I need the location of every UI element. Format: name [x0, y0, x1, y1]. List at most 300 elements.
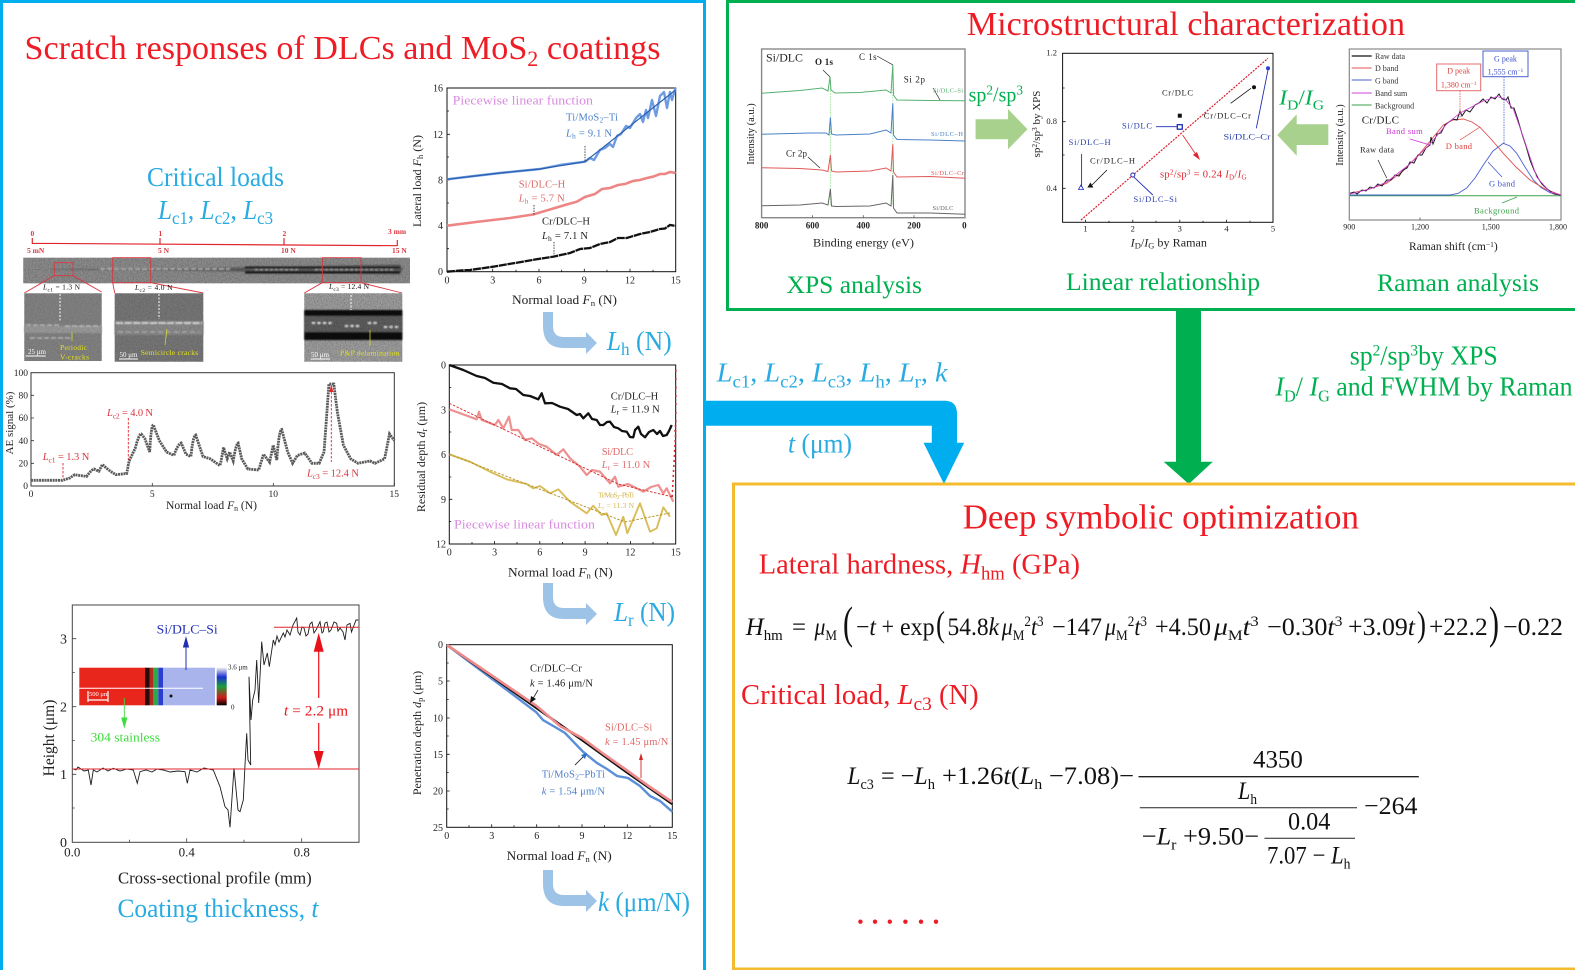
scale: scratch distance and load: 0 [30, 229, 34, 238]
formula: lateral hardness: 3 [1140, 614, 1147, 630]
chart: linear relationship: Cr/DLC–Cr [1204, 110, 1251, 120]
chart: penetration depth: 2 [575, 772, 579, 781]
heading: scratch responses: 2 [527, 46, 538, 71]
chart: residual depth: Residual depth d [414, 431, 428, 512]
chart: lateral load: L [541, 231, 548, 242]
heading: critical loads: c2 [215, 208, 230, 228]
chart: Raman spectrum: −1 [1517, 68, 1524, 74]
inset labels: critical loads on micrographs: L [134, 283, 139, 292]
chart: AE signal: n [234, 504, 238, 513]
inputs: microstructure parameters: /sp [1380, 340, 1410, 370]
chart: AE signal: 20 [18, 460, 28, 470]
chart: AE signal: (N) [238, 498, 257, 512]
label: ID/IG: D [1287, 98, 1298, 113]
arrow: microstructure data to optimization [1164, 310, 1213, 484]
formula: lateral hardness: μ [814, 614, 825, 641]
chart: penetration depth: Penetration depth d [410, 702, 424, 795]
formula: lateral hardness: μ [1213, 614, 1228, 641]
chart: residual depth: 3 [441, 406, 446, 416]
chart: height profile [41, 605, 359, 887]
chart: XPS spectra: Binding energy (eV) [813, 238, 914, 250]
chart: lateral load: 2 [599, 116, 603, 125]
formula: lateral hardness: 3 [1335, 614, 1342, 630]
chart: penetration depth: 6 [534, 831, 539, 842]
formula: lateral hardness: M [1013, 628, 1024, 644]
heading: critical loads: L [200, 195, 215, 225]
chart: linear relationship: 2 [1131, 224, 1135, 234]
chart: penetration depth: 0 [444, 831, 449, 842]
inputs: microstructure parameters [1274, 340, 1573, 406]
arrow: to k [543, 870, 597, 912]
chart: linear relationship: 2 [1030, 144, 1039, 148]
chart: residual depth: n [587, 571, 592, 581]
inputs: scratch parameters: k [935, 358, 949, 388]
chart: penetration depth: Si/DLC–Si [605, 723, 652, 734]
chart: lateral load: h [572, 132, 576, 141]
heading: critical load: Critical load, L [741, 680, 913, 711]
label: Lh: L [606, 326, 621, 356]
chart: Raman spectrum: 1,500 [1482, 222, 1500, 231]
chart: penetration depth: 20 [433, 786, 443, 798]
chart: penetration depth: 0 [438, 640, 443, 651]
chart: Raman spectrum: G band [1375, 76, 1398, 85]
chart: residual depth: 15 [671, 548, 681, 558]
chart: AE signal: 60 [18, 414, 28, 424]
chart: linear relationship: sp [1031, 147, 1043, 157]
inputs: scratch parameters: L [859, 358, 875, 388]
chart: lateral load [410, 84, 681, 308]
chart: Raman spectrum: 1,555 cm [1488, 67, 1517, 76]
chart: penetration depth: p [415, 698, 425, 702]
chart: AE signal: 40 [18, 437, 28, 447]
formula: critical load: c3 [860, 777, 874, 793]
chart: lateral load: Cr/DLC–H [542, 216, 590, 227]
chart: height profile: 2 [60, 700, 67, 716]
formula: lateral hardness: 2 [1024, 614, 1031, 630]
inset: semicircle cracks: 50 μm [120, 351, 138, 359]
chart: linear relationship: sp [1160, 169, 1170, 180]
inputs: scratch parameters: L [763, 358, 780, 388]
chart: residual depth: 9 [441, 495, 446, 506]
label: Lr: r [628, 610, 634, 630]
chart: XPS spectra: 200 [907, 220, 921, 230]
chart: Raman spectrum: 900 [1343, 222, 1355, 231]
chart: lateral load: 9 [582, 276, 587, 286]
chart: linear relationship: D [1135, 242, 1141, 251]
chart: XPS spectra: Si/DLC [766, 53, 803, 65]
chart: lateral load: Lateral load F [410, 159, 424, 227]
formula: critical load: −264 [1364, 793, 1418, 820]
inset: periodic V-cracks [24, 293, 102, 361]
label: sp2/sp3: sp [969, 83, 986, 107]
inputs: microstructure parameters: D [1284, 387, 1296, 406]
chart: residual depth: 12 [436, 540, 446, 550]
formula: critical load: 4350 [1253, 746, 1303, 773]
scale: scratch distance and load: 10 N [281, 246, 296, 255]
chart: AE signal [4, 369, 399, 513]
chart: residual depth: 0 [441, 360, 446, 372]
chart: Raman spectrum: D band [1446, 141, 1473, 151]
chart: residual depth: = 11.3 N [604, 501, 635, 510]
chart: lateral load: (N) [595, 292, 617, 307]
label: sp2/sp3: 3 [1016, 84, 1023, 99]
formula: lateral hardness: t [1243, 614, 1252, 641]
chart: residual depth: 0 [447, 548, 452, 558]
chart: linear relationship: 2 [1170, 168, 1174, 176]
formula: critical load: L [846, 763, 860, 790]
formula: lateral hardness: ) [1417, 603, 1426, 644]
formula: lateral hardness: + [882, 614, 894, 641]
chart: lateral load: Piecewise linear function [453, 92, 594, 107]
chart: lateral load: Normal load F [512, 292, 590, 307]
inputs: microstructure parameters: I [1274, 372, 1286, 402]
chart: penetration depth: 10 [433, 714, 443, 724]
inset labels: critical loads on micrographs: = 1.3 N [53, 282, 81, 291]
chart: AE signal: 10 [269, 490, 278, 500]
chart: residual depth: (μm) [414, 402, 428, 429]
formula: critical load: h [928, 777, 935, 793]
chart: linear relationship: by Raman [1154, 238, 1207, 250]
chart: AE signal: L [42, 452, 49, 463]
inputs: scratch parameters: c1 [733, 372, 750, 392]
chart: linear relationship: / [1141, 238, 1145, 250]
chart: linear relationship: Si/DLC–Si [1134, 194, 1178, 204]
scratch track micrograph [23, 258, 410, 293]
captions: analysis methods: Linear relationship [1066, 269, 1260, 296]
chart: linear relationship: by XPS [1031, 91, 1043, 127]
formula: critical load: +1.26t(L [942, 763, 1033, 790]
chart: lateral load: Ti/MoS [566, 113, 599, 124]
chart: residual depth: Cr/DLC–H [611, 391, 659, 402]
chart: Raman spectrum: 1,800 [1549, 222, 1567, 231]
chart: penetration depth: Ti/MoS [542, 769, 575, 780]
chart: linear relationship: /sp [1031, 131, 1043, 144]
formula: critical load: +9.50− [1176, 823, 1259, 850]
scale: scratch distance and load [27, 227, 407, 255]
chart: Raman spectrum: Background [1474, 205, 1520, 215]
ellipsis: more formulas [858, 920, 938, 924]
formula: lateral hardness: hm [764, 628, 783, 644]
chart: lateral load: 0 [438, 267, 443, 278]
heading: critical loads: , [188, 195, 201, 225]
formula: critical load: r [1171, 837, 1176, 853]
chart: residual depth: L [610, 404, 617, 415]
chart: XPS spectra: Cr 2p [786, 149, 808, 159]
chart: lateral load: (N) [410, 135, 424, 155]
chart: lateral load: 6 [536, 276, 542, 286]
arrow: to Lr [543, 583, 597, 625]
chart: lateral load: 0 [444, 276, 450, 286]
inputs: scratch parameters: , [750, 358, 764, 388]
chart: linear relationship: 3 [1187, 168, 1191, 176]
label: k: k (μm/N) [598, 887, 690, 917]
chart: Raman spectrum: D peak [1447, 66, 1470, 75]
chart: linear relationship: I [1143, 238, 1150, 250]
chart: linear relationship: I [1130, 238, 1136, 250]
chart: residual depth: = 11.9 N [619, 404, 660, 415]
chart: AE signal: Normal load F [166, 498, 234, 512]
chart: lateral load: 4 [438, 221, 443, 232]
heading: critical loads: c3 [257, 208, 273, 228]
formula: lateral hardness: = [792, 614, 806, 641]
chart: XPS spectra: Si/DLC [932, 205, 954, 212]
chart: linear relationship: = 0.24 [1191, 169, 1225, 180]
scale: scratch distance and load: 2 [282, 229, 286, 238]
chart: lateral load: 15 [671, 276, 681, 286]
chart: AE signal: 100 [14, 369, 28, 379]
chart: penetration depth: 9 [580, 831, 584, 842]
chart: linear relationship: Cr/DLC–H [1090, 155, 1135, 165]
formula: lateral hardness: M [825, 628, 837, 644]
inset labels: critical loads on micrographs: c2 [140, 288, 145, 294]
chart: lateral load: –Ti [602, 113, 618, 124]
inputs: scratch parameters: L [898, 358, 915, 388]
chart: residual depth: Piecewise linear function [454, 516, 596, 531]
chart: residual depth: = 11.0 N [610, 460, 651, 471]
formula: lateral hardness: μ [1001, 614, 1013, 641]
formula: critical load: −7.08)− [1042, 763, 1134, 790]
formula: lateral hardness: M [1116, 628, 1128, 644]
formula: critical load: 7.07 − L [1267, 842, 1345, 869]
chart: lateral load: h [525, 197, 529, 206]
inputs: scratch parameters: , [885, 358, 899, 388]
chart: XPS spectra: C 1s [859, 52, 877, 62]
chart: linear relationship: G [1241, 173, 1246, 181]
captions: analysis methods [786, 269, 1539, 299]
formula: lateral hardness: −0.22 [1503, 614, 1563, 641]
chart: residual depth: (N) [591, 565, 613, 580]
inset labels: critical loads on micrographs: = 12.4 N [339, 282, 370, 291]
chart: lateral load: h [415, 154, 425, 159]
chart: linear relationship: Si/DLC [1122, 121, 1152, 131]
chart: XPS spectra: 600 [806, 220, 820, 230]
chart: residual depth: Ti/MoS [598, 490, 617, 499]
chart: penetration depth: k = 1.54 μm/N [542, 786, 605, 797]
chart: linear relationship: G [1148, 242, 1155, 251]
label: 304 stainless [91, 698, 160, 745]
chart: Raman spectrum: D band [1375, 64, 1398, 73]
chart: residual depth: 12 [625, 548, 635, 558]
chart: penetration depth: n [585, 854, 591, 864]
scale: scratch distance and load: 15 N [392, 246, 407, 255]
chart: AE signal: L [306, 469, 313, 480]
scale: scratch distance and load: 5 N [158, 246, 170, 255]
chart: XPS spectra: 0 [962, 220, 967, 230]
inputs: scratch parameters: t (μm) [788, 429, 852, 459]
chart: penetration depth: (N) [590, 848, 612, 863]
formula: lateral hardness: μ [1104, 614, 1116, 641]
formula: critical load: 0.04 [1288, 808, 1331, 835]
chart: AE signal: = 1.3 N [55, 452, 90, 463]
chart: height profile: Height (μm) [41, 700, 58, 776]
chart: lateral load: Si/DLC–H [519, 180, 566, 191]
label: ID/IG: I [1278, 85, 1288, 109]
chart: Raman spectrum: G peak [1494, 55, 1517, 64]
scale: scratch distance and load: 3 mm [388, 227, 407, 236]
inset: surface map: 500 μm [89, 691, 109, 698]
chart: XPS spectra: Intensity (a.u.) [746, 103, 757, 165]
chart: Raman spectrum: G band [1489, 179, 1516, 189]
heading: critical loads: L [242, 195, 257, 225]
formula: critical load: h [1344, 856, 1351, 872]
chart: penetration depth: 12 [622, 831, 632, 842]
chart: XPS spectra: Si/DLC–Si [933, 87, 963, 94]
chart: residual depth: Si/DLC [602, 447, 633, 458]
chart: Raman spectrum: Raman shift (cm [1409, 241, 1486, 253]
chart: linear relationship: 1.2 [1046, 48, 1057, 58]
inputs: scratch parameters: , [798, 358, 812, 388]
chart: lateral load: 12 [433, 130, 443, 141]
chart: Raman spectrum: −1 [1471, 81, 1477, 87]
heading: deep symbolic optimization: Deep symbolic optimization [963, 497, 1359, 536]
captions: analysis methods: XPS analysis [786, 272, 922, 299]
chart: penetration depth: Cr/DLC–Cr [530, 664, 582, 675]
chart: AE signal: AE signal (%) [4, 391, 16, 454]
formula: lateral hardness: t [1134, 614, 1141, 641]
inset: periodic V-cracks: 25 μm [28, 348, 47, 356]
inputs: microstructure parameters: / [1296, 372, 1309, 402]
inset: periodic V-cracks: V-cracks [60, 352, 89, 361]
heading: critical loads: Critical loads [147, 162, 284, 192]
chart: Raman spectrum: Band sum [1375, 89, 1408, 98]
chart: AE signal: c1 [48, 456, 56, 464]
chart: Raman spectrum: Intensity (a.u.) [1335, 104, 1346, 166]
formula: critical load [846, 746, 1419, 872]
formula: lateral hardness: 3 [1250, 614, 1259, 630]
chart: height profile: 0.0 [64, 844, 80, 860]
heading: lateral hardness: Lateral hardness, H [759, 548, 981, 580]
chart: Raman spectrum: Raw data [1375, 52, 1405, 61]
chart: Raman spectrum: Raw data [1360, 144, 1394, 154]
inset labels: critical loads on micrographs: c1 [47, 287, 53, 293]
chart: AE signal: 0 [23, 482, 28, 492]
chart: penetration depth: Normal load F [507, 848, 585, 863]
chart: linear relationship: 5 [1271, 224, 1275, 234]
heading: microstructural characterization: Microstructural characterization [967, 6, 1405, 43]
chart: residual depth: 9 [583, 548, 588, 558]
inputs: scratch parameters: L [811, 358, 828, 388]
scale: scratch distance and load: 5 mN [27, 246, 45, 255]
heading: lateral hardness: hm [981, 563, 1005, 584]
inputs: scratch parameters: , [921, 358, 935, 388]
formula: lateral hardness: ( [936, 603, 945, 644]
label: Lr: (N) [634, 597, 675, 627]
chart: AE signal: L [106, 408, 113, 419]
label: 304 stainless: 304 stainless [91, 730, 160, 745]
formula: lateral hardness: t [1031, 614, 1038, 641]
label: ID/IG: / [1298, 85, 1305, 109]
chart: height profile: Cross-sectional profile (mm) [118, 868, 312, 887]
chart: linear relationship: 4 [1224, 224, 1229, 234]
chart: linear relationship [1030, 48, 1275, 251]
chart: linear relationship: 0.4 [1046, 183, 1058, 193]
chart: lateral load: 3 [490, 276, 495, 286]
chart: XPS spectra: 400 [857, 220, 871, 230]
inset: semicircle cracks: Semicircle cracks [141, 348, 198, 357]
inset labels: critical loads on micrographs: = 4.0 N [145, 283, 173, 292]
chart: lateral load: n [591, 298, 596, 308]
inputs: scratch parameters [716, 358, 949, 459]
chart: AE signal: = 4.0 N [120, 408, 153, 419]
inset labels: critical loads on micrographs: c3 [333, 287, 339, 293]
inset: P&P delamination: P&P delamination [340, 349, 400, 358]
chart: residual depth: 6 [537, 548, 542, 558]
chart: XPS spectra: O 1s [815, 57, 833, 67]
chart: residual depth: r [617, 407, 620, 416]
arrow: Raman to relationship [1277, 114, 1328, 156]
label: ID/IG: I [1304, 85, 1314, 109]
chart: XPS spectra: 800 [755, 220, 769, 230]
chart: penetration depth: 5 [438, 676, 443, 688]
inputs: scratch parameters: h [875, 372, 885, 392]
chart: lateral load: L [518, 194, 525, 205]
chart: lateral load: = 7.1 N [552, 231, 588, 242]
formula: lateral hardness: 54.8k [948, 614, 1000, 641]
heading: critical load: (N) [932, 680, 979, 711]
formula: lateral hardness: 2 [1128, 614, 1134, 630]
chart: residual depth: 6 [441, 450, 446, 461]
chart: linear relationship: Cr/DLC [1162, 88, 1193, 98]
inset: P&P delamination [304, 293, 402, 362]
arrow: to Lh [543, 312, 597, 354]
chart: AE signal: c2 [113, 412, 120, 420]
formula: critical load: h [1250, 792, 1257, 808]
heading: critical loads [147, 162, 284, 228]
inputs: scratch parameters: c3 [828, 372, 846, 392]
formula: critical load: h [1034, 777, 1043, 793]
chart: AE signal: = 12.4 N [320, 469, 359, 480]
panel: deep symbolic optimization [734, 484, 1575, 969]
chart: lateral load: 8 [438, 176, 443, 186]
panel: microstructural characterization [728, 2, 1575, 310]
panel: scratch responses [2, 2, 704, 970]
label: Lh: (N) [630, 326, 672, 356]
inputs: microstructure parameters: 2 [1373, 342, 1380, 359]
formula: lateral hardness: M [1228, 628, 1243, 644]
chart: penetration depth: 15 [433, 750, 443, 761]
label: Si/DLC-Si: Si/DLC–Si [157, 621, 218, 636]
chart: residual depth: L [597, 501, 602, 510]
captions: analysis methods: Raman analysis [1377, 270, 1539, 297]
formula: lateral hardness: 3 [1037, 614, 1044, 630]
inset: periodic V-cracks: Periodic [60, 343, 88, 352]
chart: Raman spectrum: Band sum [1386, 126, 1423, 136]
chart: linear relationship: /sp [1174, 169, 1187, 180]
chart: residual depth: 2 [617, 495, 620, 501]
chart: XPS spectra [746, 49, 967, 250]
chart: linear relationship: I [1237, 169, 1242, 180]
chart: lateral load: = 9.1 N [576, 129, 612, 140]
chart: lateral load: = 5.7 N [529, 194, 565, 205]
chart: AE signal: 15 [390, 490, 399, 500]
chart: penetration depth: (μm) [410, 671, 424, 698]
inset labels: critical loads on micrographs: L [42, 282, 47, 291]
inputs: microstructure parameters: by XPS [1418, 340, 1498, 370]
chart: height profile: 3 [60, 632, 67, 648]
label: sp2/sp3: 2 [986, 84, 993, 99]
chart: height profile: 0 [60, 836, 67, 851]
chart: linear relationship: / [1234, 169, 1237, 180]
chart: linear relationship: 0.8 [1046, 116, 1057, 126]
chart: linear relationship: 3 [1178, 224, 1182, 234]
chart: AE signal: 5 [150, 490, 155, 500]
chart: height profile: 0.4 [179, 844, 195, 860]
chart: lateral load: h [548, 234, 552, 243]
heading: critical load: c3 [913, 694, 932, 715]
formula: critical load: = −L [881, 763, 928, 790]
chart: linear relationship: Si/DLC–Cr [1224, 131, 1271, 141]
formula: lateral hardness: exp [900, 614, 935, 641]
